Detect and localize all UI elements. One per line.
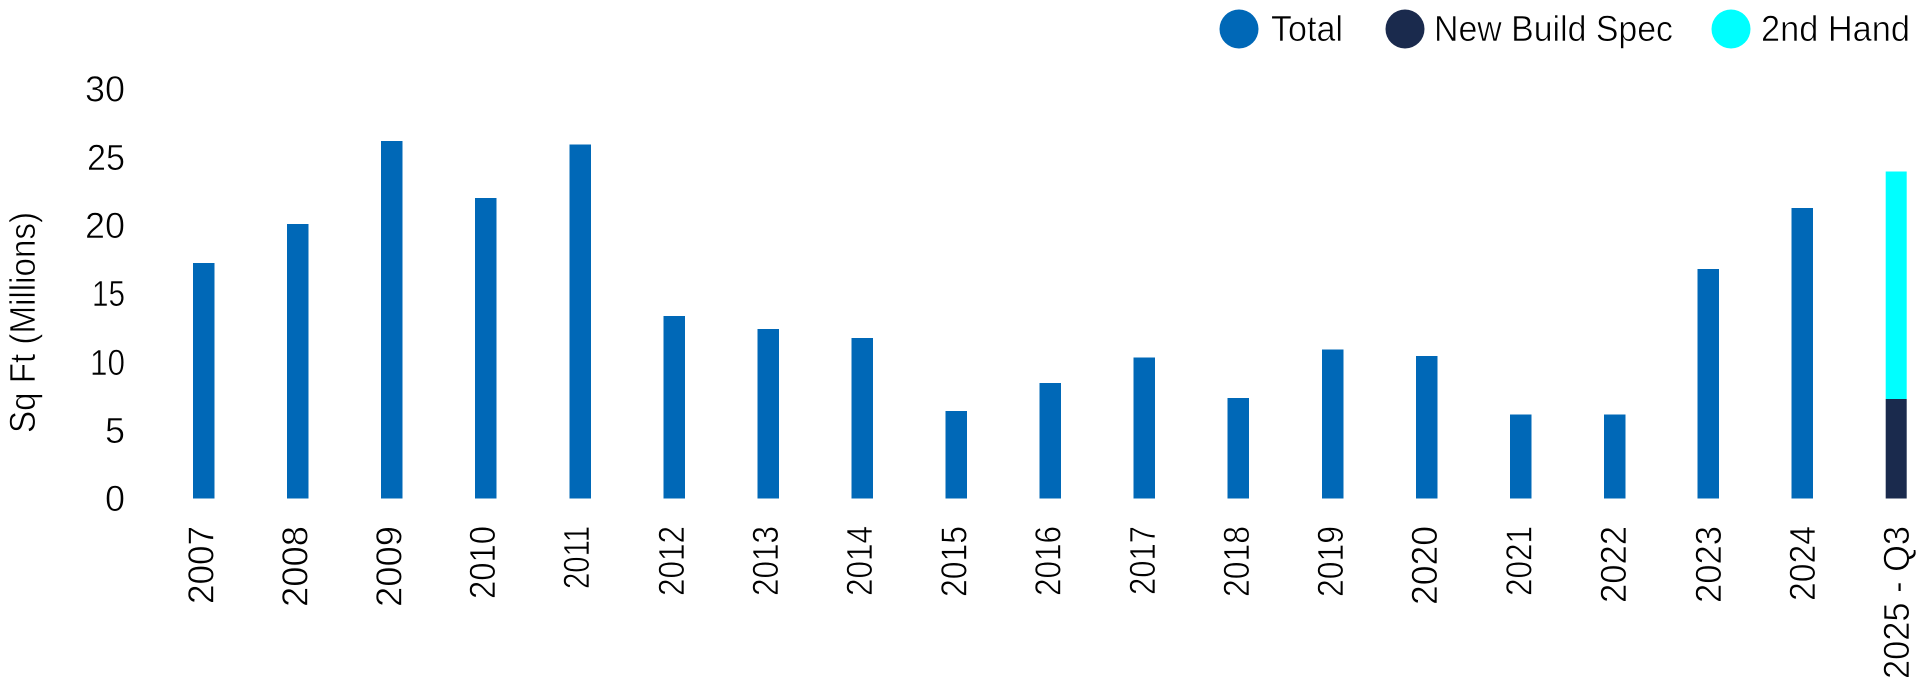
x axis labels: 2015 [934,526,974,597]
x axis labels: 2008 [274,526,316,607]
x axis labels [180,526,1917,679]
legend item: New Build Spec: New Build Spec [1434,8,1673,49]
x axis labels: 2011 [556,526,597,589]
y axis title: Sq Ft (Millions) [2,212,43,433]
x axis labels: 2023 [1688,526,1729,603]
x axis labels: 2025 - Q3 [1876,526,1917,679]
stacked bar: 2025 Q3 [1886,172,1907,498]
x axis labels: 2009 [368,526,410,607]
y axis labels [85,68,125,519]
x axis labels: 2013 [745,526,786,596]
x axis labels: 2022 [1593,526,1634,603]
x axis labels: 2019 [1310,526,1351,597]
legend item: 2nd Hand: 2nd Hand [1761,8,1910,49]
x axis labels: 2010 [462,526,503,599]
y axis labels: 20 [85,205,125,246]
legend [1220,8,1910,49]
x axis labels: 2018 [1216,526,1257,597]
x axis labels: 2017 [1122,526,1163,595]
x axis labels: 2024 [1782,526,1823,601]
y axis labels: 5 [105,410,125,451]
x axis labels: 2021 [1498,526,1540,596]
y axis labels: 10 [90,342,125,383]
y axis labels: 25 [87,137,125,178]
x axis labels: 2014 [839,526,880,596]
x axis labels: 2020 [1404,526,1445,605]
x axis labels: 2016 [1028,526,1068,596]
legend item: Total: Total [1271,8,1343,49]
y axis labels: 0 [105,478,125,519]
x axis labels: 2007 [180,526,222,604]
x axis labels: 2012 [651,526,692,596]
bars: total [193,141,1813,498]
y axis labels: 30 [85,68,125,110]
y axis labels: 15 [92,273,125,314]
legend item: Total [1220,8,1343,49]
